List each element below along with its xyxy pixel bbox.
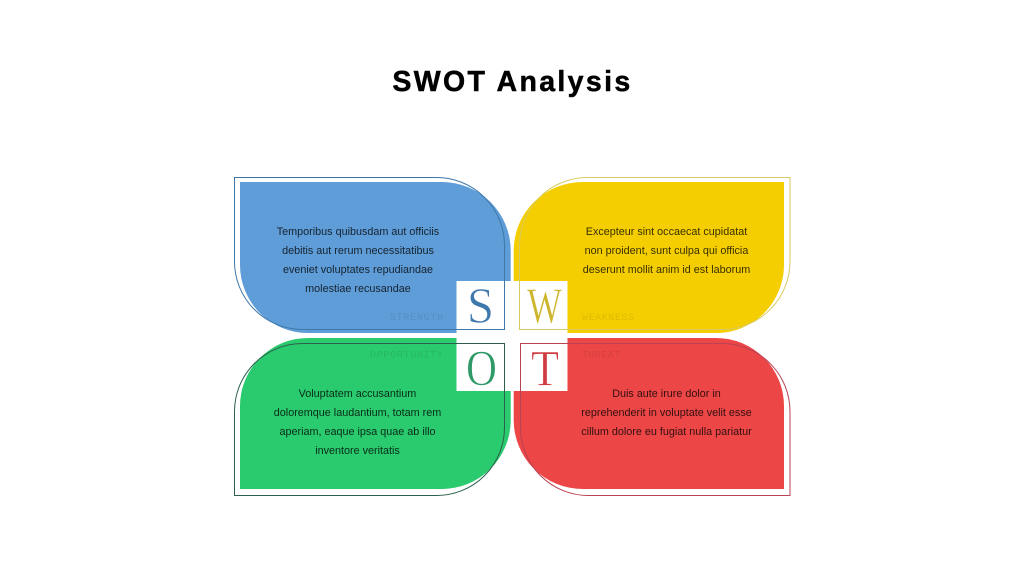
text block: threats: Duis aute irure dolor in: [612, 388, 721, 400]
text block: threats: cillum dolore eu fugiat nulla pariatur: [581, 426, 752, 438]
text block: strengths: Temporibus quibusdam aut officiis: [277, 226, 440, 238]
text block: threats: [581, 388, 752, 438]
text block: weaknesses: Excepteur sint occaecat cupidatat: [586, 226, 747, 238]
panel outlines: [234, 177, 790, 496]
outline: opportunities: [234, 344, 505, 496]
letter W: W: [527, 279, 563, 335]
text block: strengths: eveniet voluptates repudiandae: [283, 264, 433, 276]
text block: weaknesses: [583, 226, 750, 276]
outline: threats: [520, 344, 790, 496]
text block: weaknesses: deserunt mollit anim id est laborum: [583, 264, 750, 276]
outline: weaknesses: [520, 178, 790, 330]
text block: strengths: [277, 226, 440, 295]
label: weakness: WEAKNESS: [582, 313, 634, 324]
outline: strengths: [234, 177, 504, 330]
label: opportunity: OPPORTUNITY: [370, 350, 443, 362]
center white block: [456, 281, 568, 391]
text block: opportunities: inventore veritatis: [315, 445, 400, 457]
text block: opportunities: aperiam, eaque ipsa quae ab illo: [279, 426, 436, 438]
text block: opportunities: doloremque laudantium, totam rem: [274, 407, 441, 419]
label: threat: THREAT: [582, 350, 620, 362]
panel fill: strengths: [240, 182, 511, 333]
text block: opportunities: [274, 388, 441, 457]
text block: weaknesses: non proident, sunt culpa qui officia: [585, 245, 748, 257]
letter T: T: [531, 342, 559, 398]
letter S: S: [467, 279, 494, 335]
text block: strengths: debitis aut rerum necessitatibus: [282, 245, 435, 257]
title: SWOT Analysis: [392, 66, 633, 98]
label: strength: STRENGTH: [390, 313, 443, 324]
panel fill: threats: [514, 338, 784, 489]
panel fill: opportunities: [240, 338, 511, 489]
panel fill: weaknesses: [514, 182, 784, 333]
letter O: O: [466, 342, 497, 398]
panel: fills of the four quadrants: [240, 182, 784, 489]
text block: threats: reprehenderit in voluptate velit esse: [581, 407, 752, 419]
text block: strengths: molestiae recusandae: [305, 283, 411, 295]
text block: opportunities: Voluptatem accusantium: [299, 388, 416, 400]
